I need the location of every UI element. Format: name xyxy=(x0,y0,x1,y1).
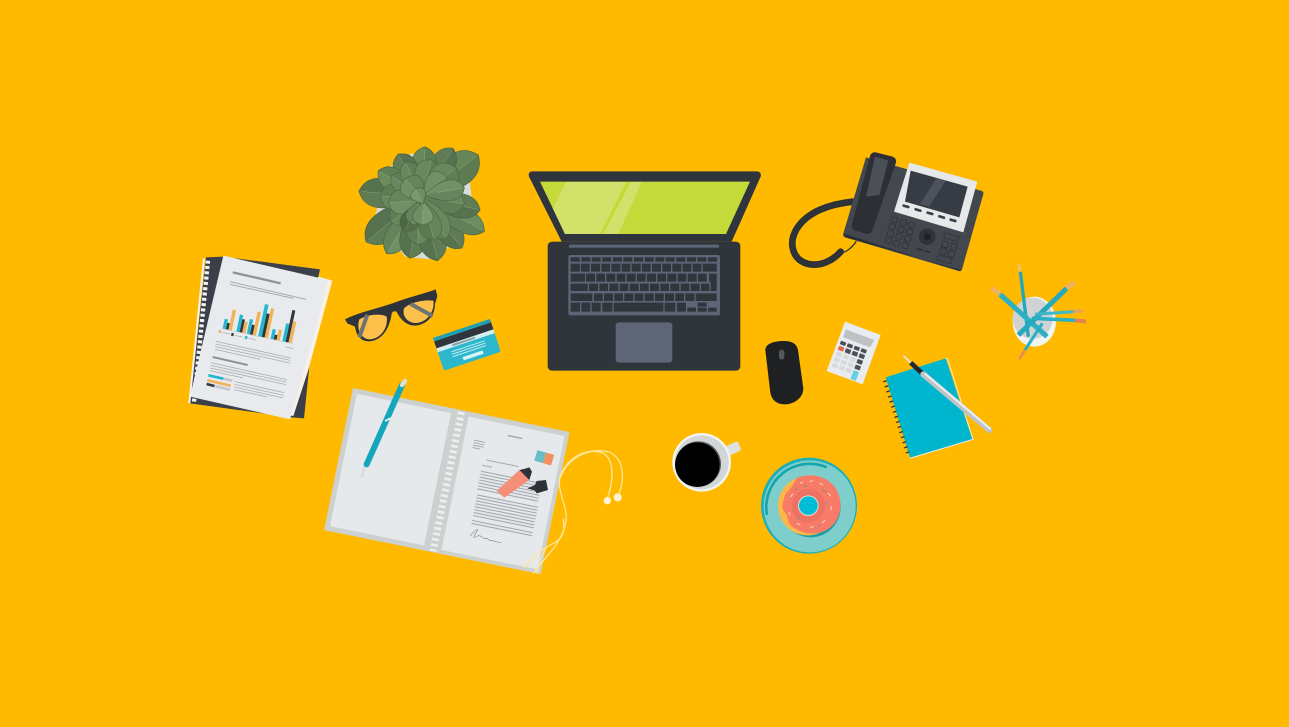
icon: desk telephone xyxy=(792,152,983,271)
report small bars xyxy=(207,375,232,390)
paper sheet front xyxy=(190,256,328,419)
sprinkles xyxy=(789,481,832,527)
phone display xyxy=(894,163,977,232)
icon: highlighter marker xyxy=(497,467,548,498)
icon: open ring notebook xyxy=(324,388,570,574)
phone keypad xyxy=(885,217,915,249)
icon: eraser xyxy=(534,450,554,465)
paper sheet back xyxy=(280,277,332,416)
screen glare xyxy=(553,182,642,234)
icon: spiral notepad with pen xyxy=(885,356,990,458)
donut xyxy=(781,477,841,537)
dark binder behind papers xyxy=(190,257,320,418)
bar chart xyxy=(222,296,300,344)
icon: coffee cup xyxy=(672,433,741,492)
spiral binding xyxy=(433,412,461,551)
signature xyxy=(470,528,503,543)
chart legend xyxy=(218,330,293,349)
pen xyxy=(904,356,990,430)
hinge bar xyxy=(569,245,719,248)
icon: pencil cup xyxy=(992,264,1086,359)
laptop screen xyxy=(540,182,750,234)
phone handset xyxy=(852,152,896,234)
icon: credit card xyxy=(433,319,501,371)
phone side buttons xyxy=(937,233,959,264)
white spiral comb xyxy=(189,258,208,403)
document header lines xyxy=(469,429,524,472)
document body lines xyxy=(470,471,543,536)
right page xyxy=(442,417,565,569)
notepad cover xyxy=(886,358,972,458)
icon: calculator xyxy=(827,322,881,384)
icon: laptop xyxy=(529,171,761,371)
report body text lines xyxy=(210,341,291,398)
laptop base xyxy=(548,242,740,371)
touchpad xyxy=(616,322,672,363)
icon: earbuds xyxy=(523,451,622,573)
notebook cover xyxy=(324,388,570,574)
report heading lines xyxy=(230,272,306,299)
phone coiled cord xyxy=(792,202,856,265)
laptop lid xyxy=(529,171,761,242)
phone body xyxy=(843,157,983,271)
icon: potted succulent plant xyxy=(357,142,490,264)
phone soft keys xyxy=(902,204,957,223)
cup xyxy=(1013,297,1056,347)
pencils xyxy=(992,264,1086,359)
icon: computer mouse xyxy=(765,341,803,404)
icon: donut on plate xyxy=(761,458,857,554)
icon: teal pen xyxy=(362,381,405,477)
left page xyxy=(330,394,451,545)
icon: eyeglasses xyxy=(345,289,437,341)
phone navigation dial xyxy=(917,228,936,252)
notepad spiral xyxy=(885,381,908,455)
keyboard xyxy=(568,255,720,315)
plate xyxy=(761,458,857,554)
icon: report documents with bar chart xyxy=(189,256,332,419)
